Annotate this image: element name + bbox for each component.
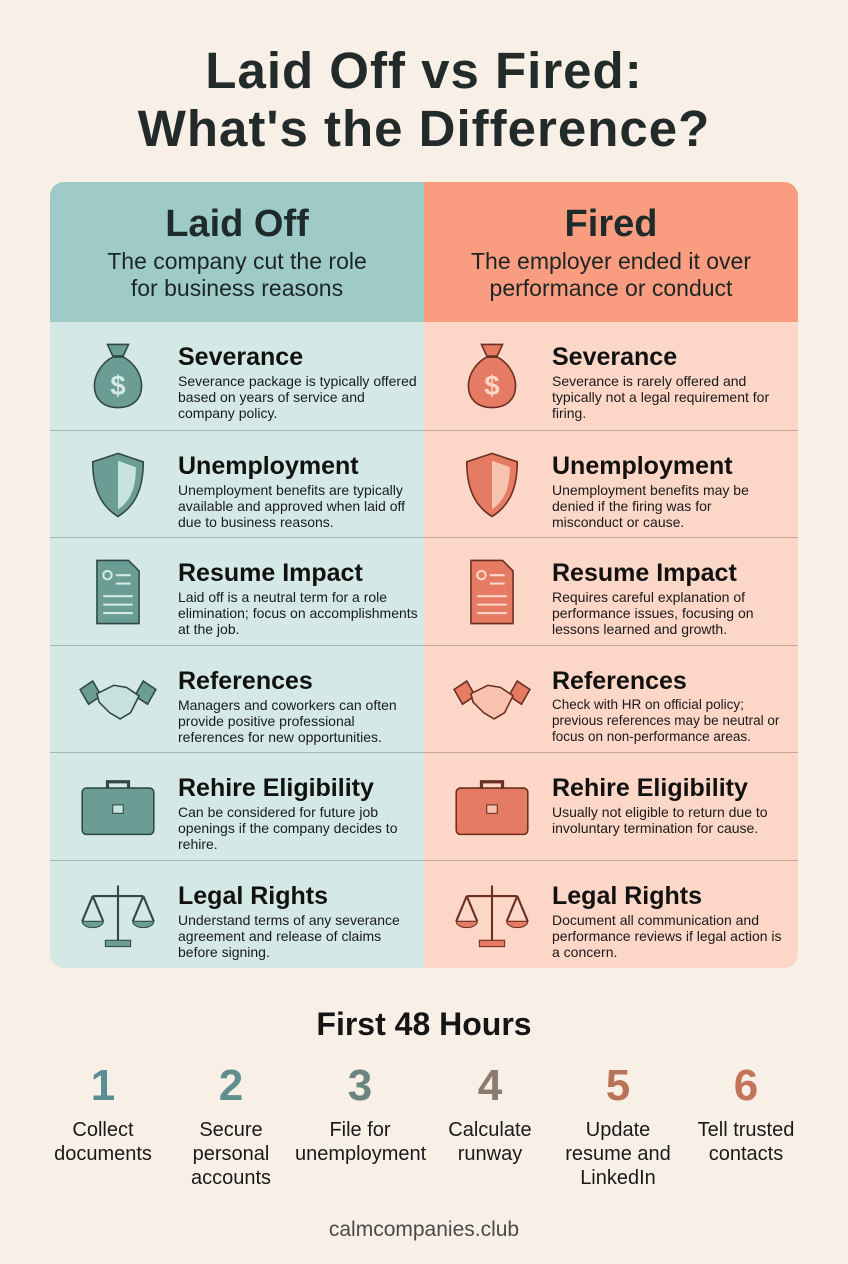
panel: fired [424,182,798,968]
row: references: Managers and coworkers can often provide positive professional references for new opportunities. [178,696,397,744]
step 1: Collect documents [54,1119,152,1165]
row: resume impact: Resume Impact [552,559,737,587]
title: What's the Difference? [138,100,710,157]
icon: handshake [79,680,157,720]
row: rehire eligibility [424,752,798,860]
row: rehire eligibility: Rehire Eligibility [178,774,374,802]
icon: scales [455,886,529,948]
step 6 [698,1061,794,1165]
header: fired [424,182,798,322]
row: resume impact [50,537,424,644]
header: laid off [50,182,424,322]
row: severance [468,343,769,421]
step 4 [448,1061,532,1165]
step 6: 6 [734,1061,758,1110]
icon: briefcase [81,780,155,836]
row: resume impact: Resume Impact [178,559,363,587]
steps list [54,1061,794,1189]
header: fired: The employer ended it over [471,248,751,274]
icon: scales [81,886,155,948]
row: rehire eligibility: Rehire Eligibility [552,774,748,802]
step 4: 4 [478,1061,502,1110]
step 1: 1 [91,1061,115,1110]
row: rehire eligibility: Can be considered for future job openings if the company decides to rehire. [178,804,397,852]
row: unemployment [50,430,424,537]
heading: first 48 hours: First 48 Hours [316,1006,532,1042]
row: legal rights: Document all communication and performance reviews if legal action is a concern. [552,912,782,960]
step 6: Tell trusted contacts [698,1119,794,1165]
header: laid off: Laid Off [165,203,309,245]
step 4: Calculate runway [448,1119,532,1165]
step 3: File for unemployment [295,1119,426,1165]
header: laid off: The company cut the role [107,248,367,274]
step 2 [191,1061,271,1189]
icon: money bag [94,344,142,408]
row: unemployment: Unemployment [552,452,733,480]
footer url: calmcompanies.club [329,1218,519,1241]
header: laid off: for business reasons [131,275,343,301]
step 5 [565,1061,671,1189]
icon: document [470,560,514,624]
row: references [50,644,424,752]
row: severance: Severance [178,343,303,371]
icon: money bag: $ [110,370,126,401]
row: legal rights: Understand terms of any severance agreement and release of claims before signing. [178,912,400,960]
icon: document [96,560,140,624]
step 2: Secure personal accounts [191,1119,271,1189]
icon: shield [466,452,518,518]
row: legal rights: Legal Rights [552,882,702,910]
header: fired: performance or conduct [490,275,732,301]
row: unemployment: Unemployment benefits are typically available and approved when laid off due to business reasons. [178,482,405,530]
step 5: Update resume and LinkedIn [565,1119,671,1189]
row: unemployment [424,430,798,537]
row: severance [94,343,417,421]
header: fired: Fired [565,203,657,245]
row: rehire eligibility [50,752,424,860]
row: references: References [178,666,313,694]
row: references: Check with HR on official policy; previous references may be neutral or focus on non-performance areas. [552,696,779,744]
step 3 [295,1061,426,1165]
comparison table [50,182,798,968]
icon: handshake [453,680,531,720]
step 2: 2 [219,1061,243,1110]
row: severance: Severance is rarely offered and typically not a legal requirement for firing. [552,373,769,421]
row: unemployment: Unemployment [178,452,359,480]
icon: money bag: $ [484,370,500,401]
row: rehire eligibility: Usually not eligible to return due to involuntary termination for cause. [552,804,768,836]
row: resume impact: Requires careful explanation of performance issues, focusing on lessons learned and growth. [552,589,754,637]
row: severance: Severance package is typically offered based on years of service and company policy. [178,373,417,421]
title [138,42,710,157]
row: legal rights [424,860,798,967]
row: references: References [552,666,687,694]
icon: briefcase [455,780,529,836]
row: legal rights [50,860,424,967]
row: resume impact [424,537,798,644]
row: severance: Severance [552,343,677,371]
step 5: 5 [606,1061,630,1110]
row: references [424,644,798,752]
panel: laid off [50,182,424,968]
step 1 [54,1061,152,1165]
title: Laid Off vs Fired: [205,42,643,99]
row: unemployment: Unemployment benefits may be denied if the firing was for misconduct or cause. [552,482,749,530]
icon: money bag [468,344,516,408]
row: resume impact: Laid off is a neutral term for a role elimination; focus on accomplishments at the job. [178,589,418,637]
icon: shield [92,452,144,518]
row: legal rights: Legal Rights [178,882,328,910]
step 3: 3 [348,1061,372,1110]
